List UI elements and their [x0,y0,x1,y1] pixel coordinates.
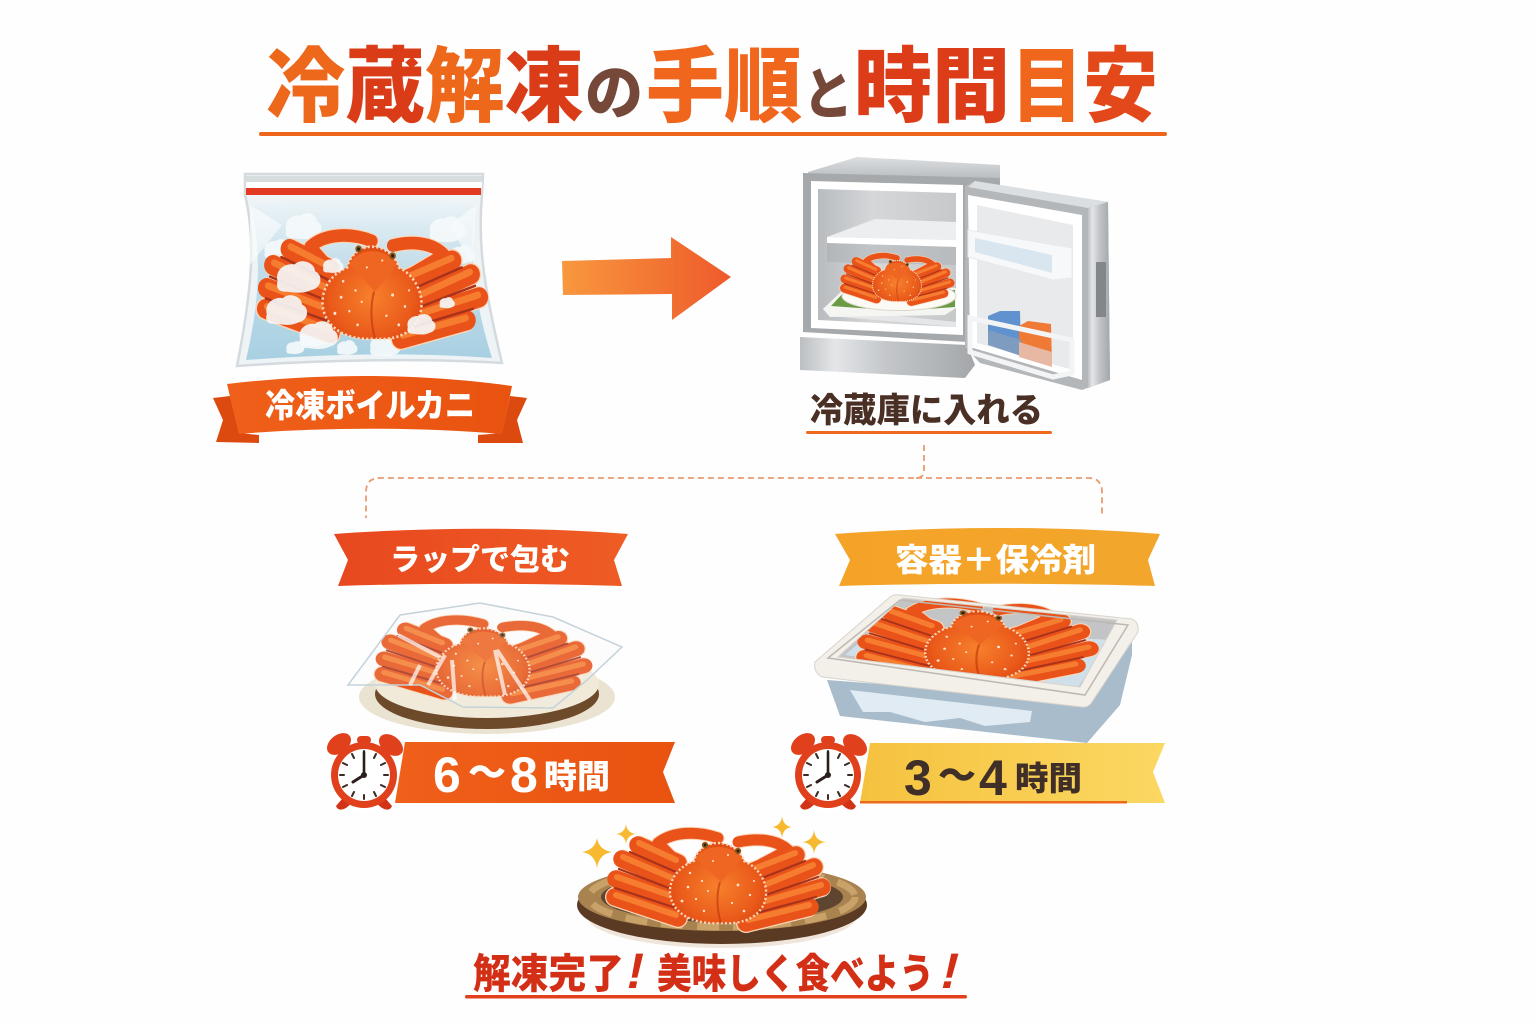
icon: crab [866,603,1089,680]
icon: container inner [838,598,1117,687]
panel: crab in container with ice [815,595,1138,743]
label: put in refrigerator: 冷蔵庫に入れる [810,392,1043,430]
icon: crab plate in fridge [823,256,956,317]
arrow [562,237,731,320]
icon: container rim [815,595,1138,707]
title: 時間 [854,42,1010,133]
icon: ice under rim [850,690,1032,726]
time ribbon: 6-8 hours: 時間 [544,758,610,795]
ribbon: container + ice pack: 容器＋保冷剤 [895,542,1096,578]
panel: wrapped crab on plate [348,603,622,734]
title: の [585,60,643,127]
icon: door bottles [988,311,1052,367]
title: と [803,63,853,126]
closing message: 美味しく食べよう [657,951,934,997]
time ribbon: 3-4 hours [860,743,1165,806]
icon: rim groove [828,600,1128,695]
time ribbon: 6-8 hours: 8 [510,747,538,803]
icon: crab [615,833,822,923]
icon: wooden plate [577,863,867,948]
icon: door shelves [968,230,1072,377]
ribbon: wrap [334,529,628,586]
label ribbon: frozen boiled crab: 冷凍ボイルカニ [265,387,475,424]
icon: frozen crab [266,235,479,339]
time ribbon: 3-4 hours: 時間 [1015,760,1082,797]
title: 安 [1083,42,1158,133]
label underline [806,431,1052,434]
closing message: ! [622,943,650,999]
title: 冷蔵解凍 [266,42,584,133]
title: 手順 [646,42,802,133]
closing underline [465,995,967,998]
icon: sparkles [582,816,826,868]
icon: fridge door [965,181,1110,390]
closing message: ! [935,943,966,999]
time ribbon: 6-8 hours: 6 [433,747,461,803]
closing message [473,943,966,999]
time ribbon: 3-4 hours: 4 [979,750,1007,806]
title [266,42,1158,133]
icon: ice chunks on crab [266,258,455,349]
icon: freezer bag [237,174,502,366]
icon: fridge base [800,337,975,378]
icon: plastic wrap [348,603,622,708]
icon: alarm clock 1 [323,729,407,813]
time ribbon: 3-4 hours: 3 [904,750,932,806]
time ribbon: 6-8 hours: ～ [468,753,506,795]
time ribbon: 6-8 hours [395,742,675,803]
icon: plate [359,650,615,734]
panel: refrigerator [800,157,1110,390]
icon: alarm clock 2 [787,729,871,813]
ribbon: wrap: ラップで包む [390,544,570,577]
title underline [259,132,1167,136]
closing message: 解凍完了 [473,951,624,997]
icon: crab [383,620,584,697]
panel: frozen boiled crab in bag [237,174,502,366]
title: 目 [1011,42,1083,133]
label ribbon: frozen boiled crab [213,376,527,443]
icon: fridge top [808,157,1000,183]
panel: finished crab on wooden plate [577,816,867,948]
time ribbon: 3-4 hours: ～ [938,756,976,798]
dashed connector [366,445,1102,518]
icon: fridge body [803,173,1000,342]
ribbon: container + ice pack [835,528,1160,586]
icon: container body [827,640,1132,743]
